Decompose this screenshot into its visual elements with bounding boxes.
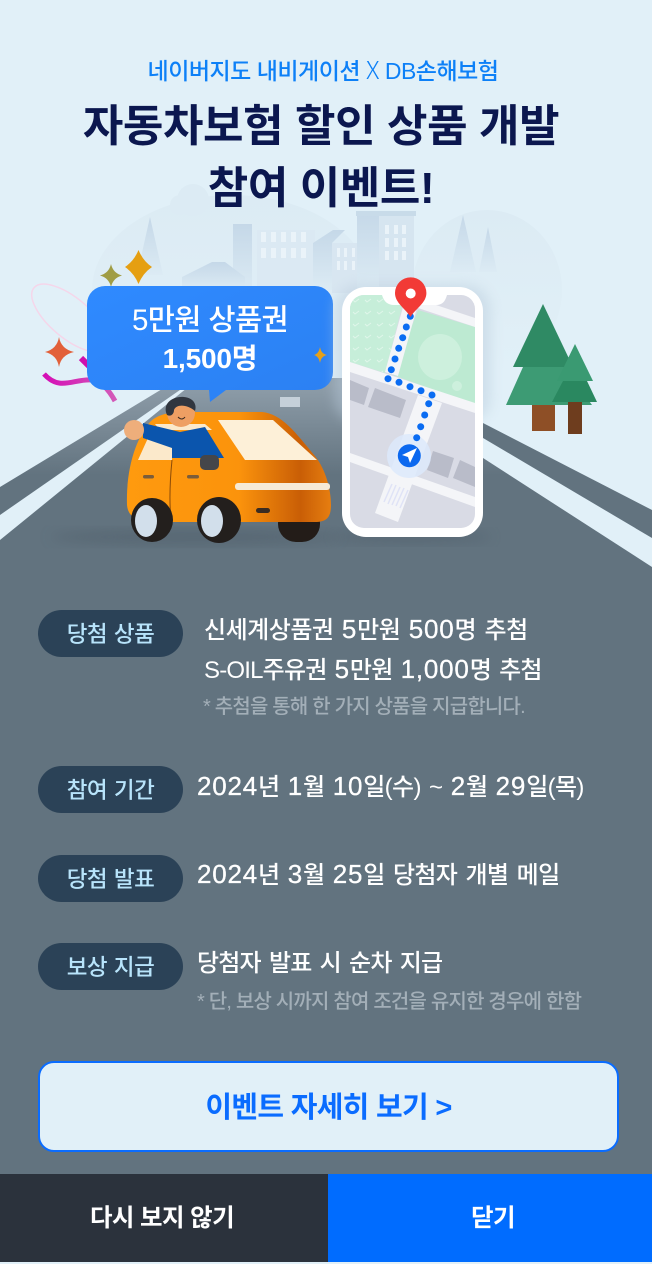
button: close — [328, 1174, 652, 1262]
announcement text: 2024년 3월 25일 당첨자 개별 메일 — [197, 859, 560, 889]
pill: reward: 보상 지급 — [67, 955, 154, 980]
prize text: 신세계상품권 5만원 500명 추첨 — [204, 614, 528, 644]
button: event details: 이벤트 자세히 보기 > — [205, 1092, 452, 1124]
speech bubble — [87, 286, 333, 402]
background city silhouette — [92, 184, 562, 385]
pill: announcement — [38, 855, 183, 902]
period text: 2024년 1월 10일(수) ~ 2월 29일(목) — [197, 771, 584, 801]
title: 자동차보험 할인 상품 개발 — [83, 102, 559, 151]
title: 참여 이벤트! — [208, 164, 434, 213]
reward note: * 단, 보상 시까지 참여 조건을 유지한 경우에 한함 — [197, 991, 581, 1013]
decoration: ribbon and sparkles — [21, 250, 152, 401]
car shadow — [50, 530, 340, 544]
prize text: S-OIL주유권 5만원 1,000명 추첨 — [204, 654, 542, 684]
pill: period: 참여 기간 — [67, 778, 154, 803]
button: do not show again: 다시 보지 않기 — [90, 1205, 234, 1232]
button: close: 닫기 — [471, 1205, 515, 1232]
button: do not show again — [0, 1174, 328, 1262]
car with driver — [124, 397, 331, 543]
road — [0, 370, 652, 1262]
pill: announcement: 당첨 발표 — [67, 867, 154, 892]
title — [83, 102, 559, 213]
bubble text: 5만원 상품권 — [132, 304, 288, 337]
pill: prize — [38, 610, 183, 657]
subtitle: 네이버지도 내비게이션 X DB손해보험 — [148, 51, 498, 87]
phone with map — [334, 277, 491, 537]
pill: period — [38, 766, 183, 813]
bubble count: 1,500명 — [163, 343, 257, 374]
prize note: * 추첨을 통해 한 가지 상품을 지급합니다. — [203, 696, 525, 718]
reward text: 당첨자 발표 시 순차 지급 — [197, 950, 442, 977]
pill: reward — [38, 943, 183, 990]
phone shadow — [332, 531, 492, 543]
button: event details — [38, 1061, 619, 1152]
pill: prize: 당첨 상품 — [67, 622, 154, 647]
trees — [506, 304, 597, 434]
prize text — [204, 614, 542, 684]
illustration: road scene — [0, 211, 652, 1174]
